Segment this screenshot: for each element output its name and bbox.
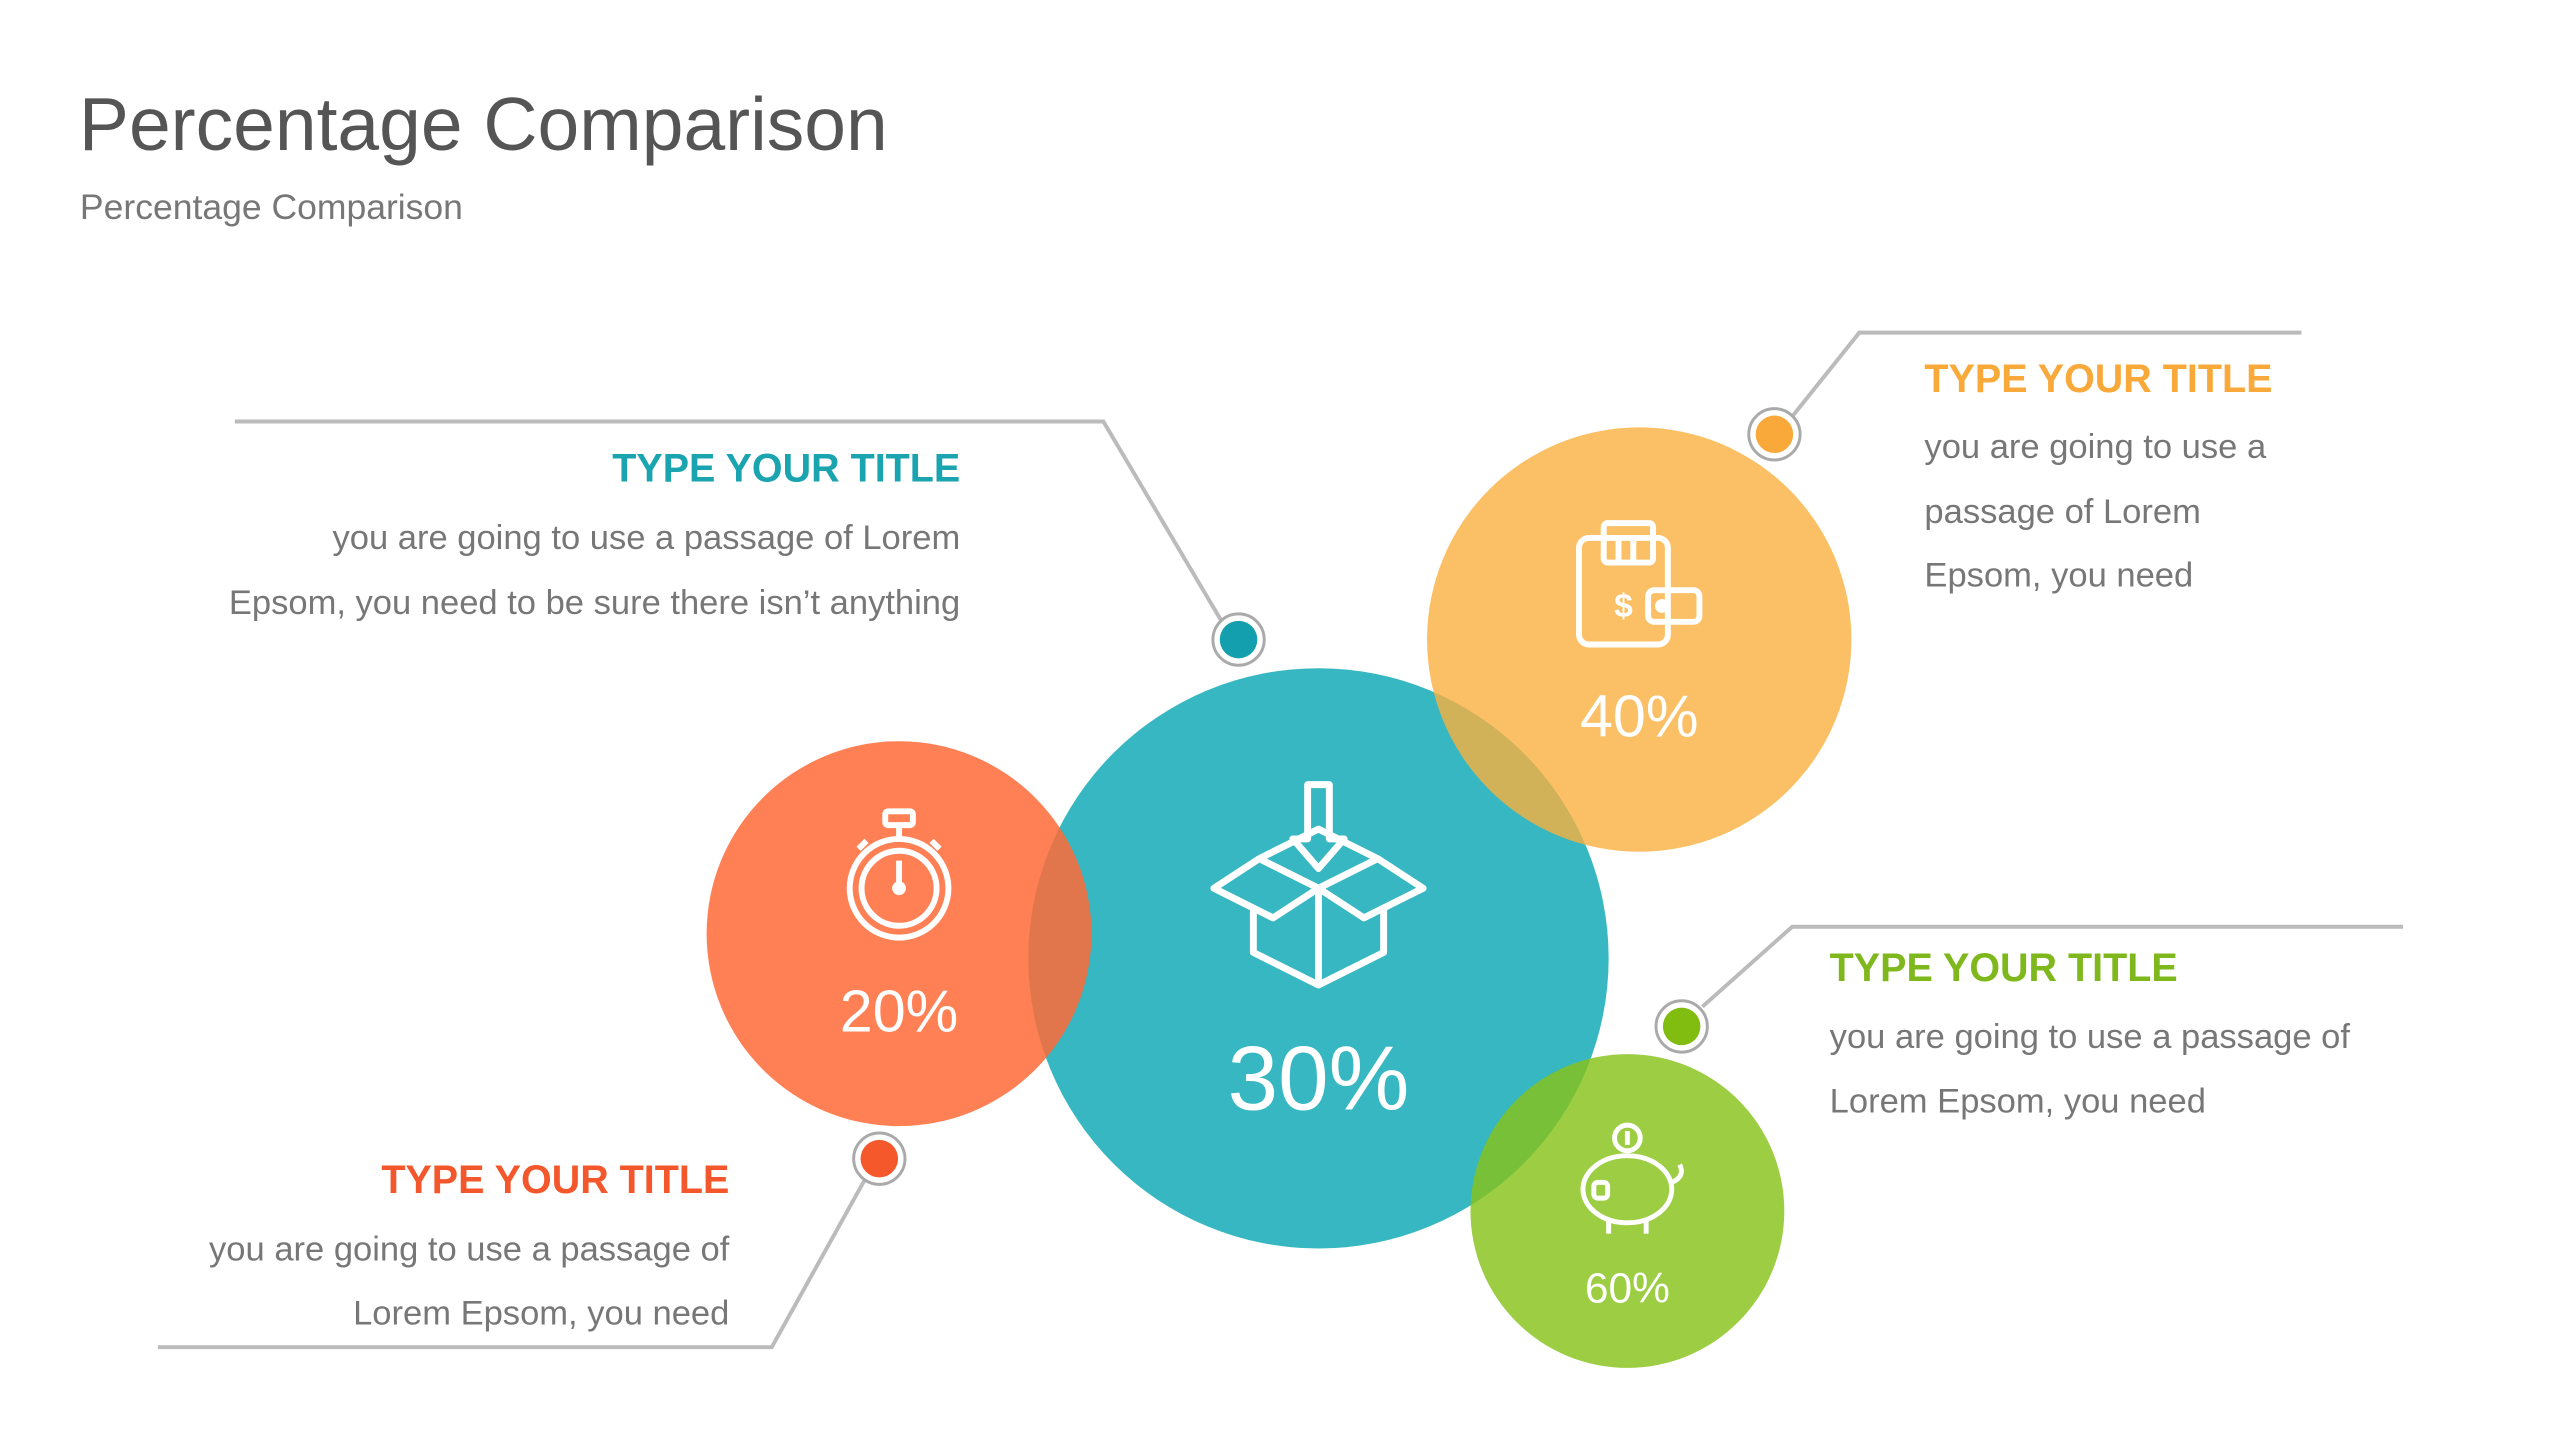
dot: teal: [1213, 614, 1264, 665]
text block: green: you are going to use a passage of: [1830, 1018, 2350, 1056]
text block: green: [1830, 946, 2350, 1120]
text block: yellow: Epsom, you need: [1924, 556, 2193, 594]
text block: yellow: you are going to use a: [1924, 428, 2267, 466]
text block: orange: Lorem Epsom, you need: [353, 1294, 729, 1332]
text: 20%: 20%: [840, 977, 958, 1044]
circle: yellow 40%: [1427, 427, 1851, 852]
text block: teal: you are going to use a passage of Lorem: [333, 519, 960, 557]
icon: wallet: [1579, 523, 1699, 645]
text block: teal: Epsom, you need to be sure there isn’t anything: [229, 584, 960, 622]
connector: green: [1702, 927, 2403, 1007]
icon: piggy bank: [1583, 1125, 1681, 1234]
text block: orange: [209, 1158, 730, 1332]
text: 60%: 60%: [1585, 1265, 1670, 1312]
connector: teal: [235, 421, 1221, 620]
text block: yellow: TYPE YOUR TITLE: [1924, 357, 2272, 401]
text: $: [1614, 588, 1633, 625]
text block: orange: you are going to use a passage of: [209, 1230, 730, 1268]
text block: green: Lorem Epsom, you need: [1830, 1082, 2206, 1120]
dot: yellow: [1749, 409, 1800, 460]
circle: orange 20%: [707, 741, 1092, 1126]
text: 30%: 30%: [1228, 1028, 1409, 1129]
text block: teal: [229, 447, 960, 622]
title: Percentage Comparison: [79, 82, 888, 166]
text block: yellow: [1924, 357, 2272, 594]
circle: teal 30%: [1028, 668, 1609, 1248]
dot: orange: [854, 1133, 905, 1184]
text: 40%: 40%: [1580, 682, 1698, 749]
connector: orange: [158, 1178, 866, 1347]
icon: stopwatch: [850, 811, 948, 938]
circle: green 60%: [1470, 1054, 1784, 1368]
text block: teal: TYPE YOUR TITLE: [612, 447, 960, 491]
text block: yellow: passage of Lorem: [1924, 493, 2201, 531]
icon: box with arrow: [1214, 785, 1423, 985]
connector: yellow: [1792, 333, 2301, 417]
dot: green: [1656, 1001, 1707, 1052]
subtitle: Percentage Comparison: [80, 187, 463, 227]
text block: green: TYPE YOUR TITLE: [1830, 946, 2178, 990]
text block: orange: TYPE YOUR TITLE: [381, 1158, 729, 1202]
